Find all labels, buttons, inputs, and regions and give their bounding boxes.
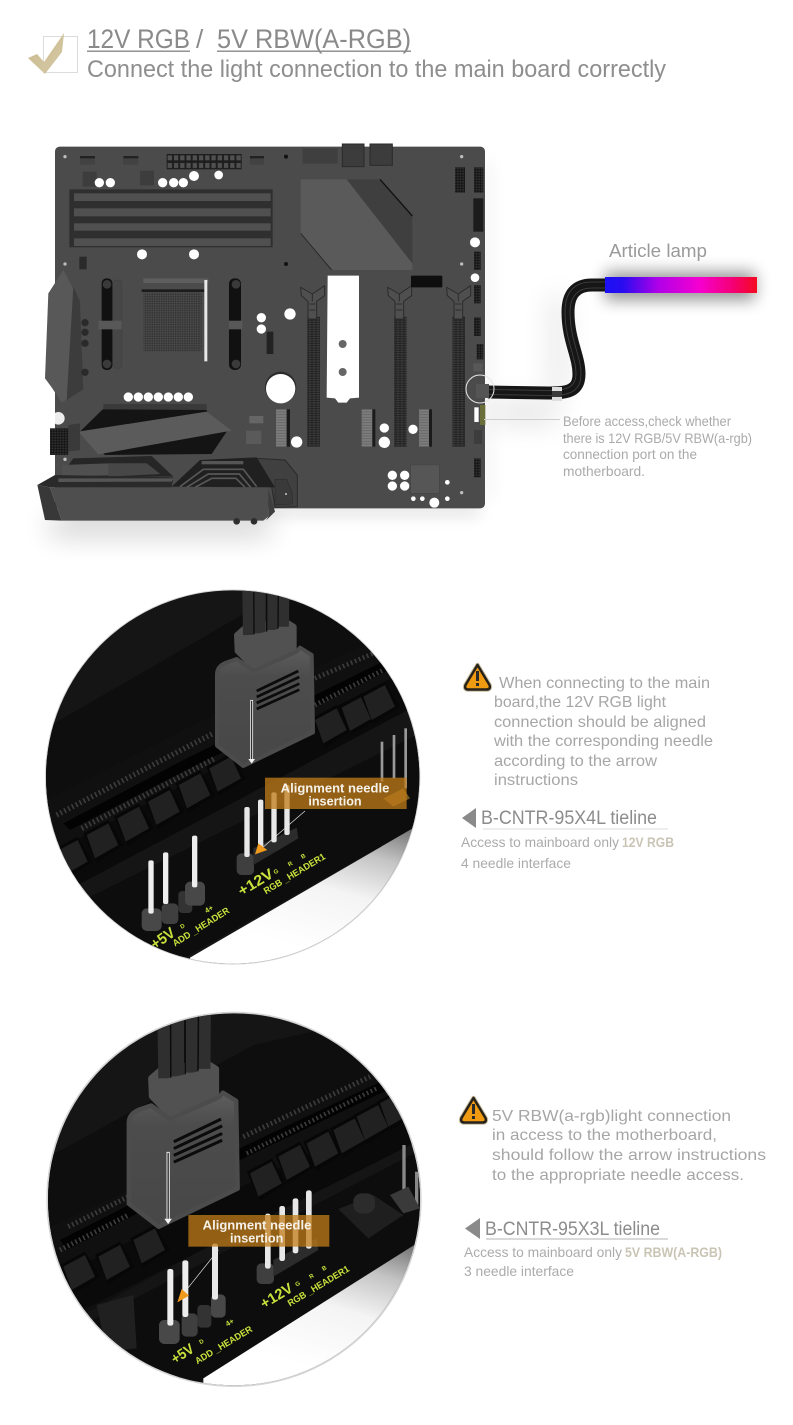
PCB lower surface xyxy=(92,1153,420,1382)
warning text: should follow the arrow instructions xyxy=(492,1147,766,1164)
RGB header pins xyxy=(257,1190,318,1284)
callout text: motherboard. xyxy=(563,463,645,479)
silkscreen text: +12V xyxy=(258,1281,296,1312)
product description xyxy=(464,1244,722,1279)
silkscreen text: B xyxy=(300,853,308,861)
panel: 12V instructions xyxy=(461,665,713,871)
ADD header pins xyxy=(142,836,205,931)
product description: Access to mainboard only xyxy=(464,1244,622,1260)
alignment label: Alignment needle xyxy=(281,781,389,795)
silkscreen text: +5V xyxy=(148,924,179,953)
alignment arrow xyxy=(177,1250,218,1302)
product heading: B-CNTR-95X3L: B-CNTR-95X3L tieline xyxy=(485,1219,660,1240)
silkscreen text: RGB _HEADER1 xyxy=(286,1264,351,1308)
PCIe slots xyxy=(267,276,471,447)
RAM slots xyxy=(69,189,273,247)
warning text: When connecting to the main xyxy=(499,675,710,692)
warning text: instructions xyxy=(494,772,578,789)
product description: 4 needle interface xyxy=(461,855,571,871)
connector plug xyxy=(126,1014,240,1229)
CMOS battery xyxy=(265,372,296,403)
mounting holes xyxy=(52,155,480,508)
icon: warning triangle xyxy=(465,665,490,690)
warning text: to the appropriate needle access. xyxy=(492,1167,744,1184)
alignment label: Alignment needle xyxy=(203,1218,311,1232)
callout text: Before access,check whether xyxy=(563,413,731,429)
PCIe slot band xyxy=(50,1074,412,1313)
cable from motherboard to light strip xyxy=(488,282,605,396)
warning text: according to the arrow xyxy=(494,753,657,770)
circle clipped scene xyxy=(46,590,420,964)
warning text: with the corresponding needle xyxy=(493,733,713,750)
connector plug xyxy=(215,590,315,768)
silkscreen text: R xyxy=(309,1273,316,1281)
yellow header detail xyxy=(480,405,485,425)
silkscreen text: ADD _HEADER xyxy=(193,1324,254,1366)
callout text: connection port on the xyxy=(563,446,697,462)
M.2 white plate xyxy=(327,276,359,403)
silkscreen text xyxy=(152,854,326,947)
white surface below board edge xyxy=(203,1245,414,1386)
silkscreen text: B xyxy=(321,1265,329,1273)
label: article lamp: Article lamp xyxy=(609,241,707,261)
warning text: in access to the motherboard, xyxy=(492,1127,717,1144)
RGB header pins xyxy=(237,785,298,875)
silkscreen text: G xyxy=(295,1281,302,1288)
lower heatsink xyxy=(50,404,232,455)
PCIe slot band xyxy=(47,645,407,884)
panel: 5V connector close-up circle xyxy=(46,1012,422,1387)
ADD header pins xyxy=(159,1244,226,1344)
title: voltage types: 12V RGB xyxy=(87,24,190,54)
panel: motherboard diagram xyxy=(37,144,757,534)
light strip xyxy=(605,277,757,293)
warning text xyxy=(492,1108,766,1184)
alignment label: insertion xyxy=(308,795,362,809)
title: voltage types: / xyxy=(196,24,204,54)
circle clipped scene xyxy=(48,1013,420,1386)
background parts: button and pins xyxy=(97,1145,420,1352)
silkscreen text: +12V xyxy=(235,866,277,900)
panel: 12V connector close-up circle xyxy=(45,589,420,965)
left VRM heatsink xyxy=(45,257,89,403)
motherboard illustration xyxy=(37,144,485,525)
alignment label xyxy=(188,1215,329,1247)
silkscreen text: D xyxy=(180,923,187,931)
icon: gold check mark in box xyxy=(28,33,78,74)
chipset heatsink xyxy=(301,179,412,270)
silkscreen text: G xyxy=(273,868,280,876)
warning text xyxy=(493,675,713,789)
CPU socket xyxy=(142,278,208,361)
right edge headers xyxy=(455,167,483,477)
PCB lower surface xyxy=(90,736,420,957)
callout text: there is 12V RGB/5V RBW(a-rgb) xyxy=(563,430,752,446)
product description: 3 needle interface xyxy=(464,1263,574,1279)
warning text: connection should be aligned xyxy=(494,714,706,731)
cable clamp xyxy=(552,387,562,401)
header: check icon and title xyxy=(28,24,666,83)
background pins right xyxy=(381,728,410,807)
silkscreen text: 4+ xyxy=(203,903,215,915)
product heading: B-CNTR-95X4L: B-CNTR-95X4L tieline xyxy=(481,808,657,829)
silkscreen text: ADD _HEADER xyxy=(171,905,231,948)
product description: 12V RGB xyxy=(622,834,674,850)
icon: warning triangle xyxy=(461,1098,486,1122)
product description: Access to mainboard only xyxy=(461,834,619,850)
white surface below board edge xyxy=(190,828,412,964)
I/O shroud xyxy=(37,456,297,525)
title: voltage types xyxy=(87,24,411,54)
product description: 5V RBW(A-RGB) xyxy=(625,1244,722,1260)
warning text: 5V RBW(a-rgb)light connection xyxy=(492,1108,731,1125)
alignment arrow xyxy=(255,811,305,854)
top edge connectors xyxy=(80,144,392,187)
silkscreen text: +5V xyxy=(168,1341,197,1368)
CPU brackets xyxy=(98,278,242,370)
callout line xyxy=(484,418,560,420)
connector on motherboard with ring xyxy=(466,375,494,403)
soft shadows around board and cable xyxy=(50,160,755,534)
panel: 5V instructions xyxy=(461,1098,766,1279)
subtitle: Connect the light connection to the main board correctly xyxy=(87,56,666,83)
silkscreen text: 4+ xyxy=(224,1316,236,1328)
silkscreen text: RGB _HEADER1 xyxy=(262,851,327,896)
title: voltage types: 5V RBW(A-RGB) xyxy=(217,24,411,54)
silkscreen text: R xyxy=(287,861,295,868)
warning text: board,the 12V RGB light xyxy=(494,694,667,711)
alignment label: insertion xyxy=(230,1231,283,1245)
alignment label xyxy=(265,778,407,809)
silkscreen text: D xyxy=(199,1338,206,1346)
callout text xyxy=(563,413,752,479)
silkscreen text xyxy=(168,1264,351,1368)
gray slots near PCIe xyxy=(246,409,439,493)
product description xyxy=(461,834,674,871)
